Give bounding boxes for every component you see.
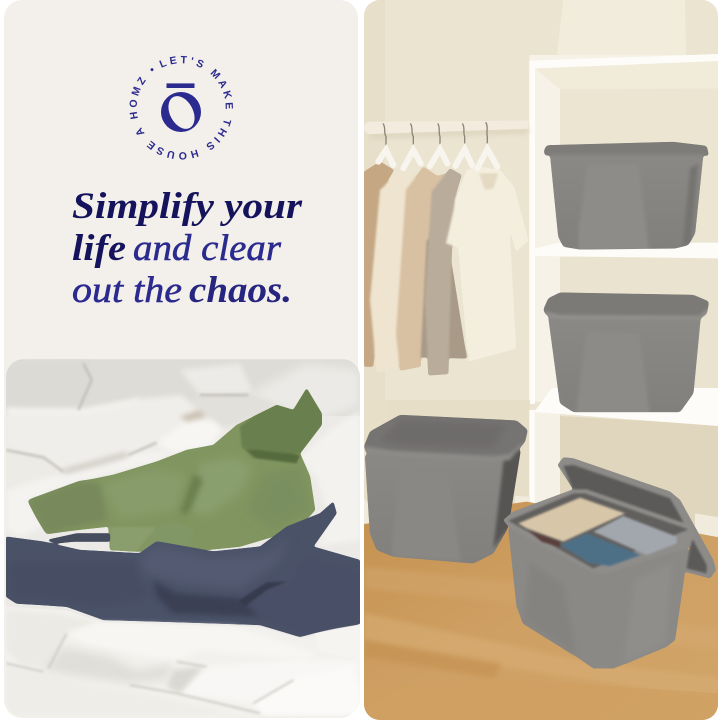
- garment: dark lining behind cardigan: [421, 240, 467, 358]
- hanging clothes: [364, 162, 528, 375]
- heading: Simplify your life and clear out the chaos: [72, 186, 303, 311]
- bedding: lower folds: [6, 619, 360, 716]
- garment: white t-shirt: [446, 167, 528, 362]
- towel: blue: [560, 533, 641, 566]
- photo: messy bed with clothes: [3, 359, 363, 717]
- storage bin: middle shelf: [543, 293, 709, 412]
- logo: circular slogan text: LET'S MAKE THIS HOUSE A HOMZ •: [130, 56, 233, 160]
- heading line 2 bold word: life: [72, 228, 126, 269]
- clothing: green shirt: [28, 388, 322, 552]
- shelving unit: [529, 54, 719, 404]
- folded box on top shelf: [557, 0, 686, 57]
- garment: grey cardigan: [425, 168, 462, 375]
- logo: macron bar: [166, 83, 194, 88]
- heading line 1: Simplify your: [72, 186, 303, 227]
- garment: cream sweater: [370, 168, 416, 373]
- bedding: right side pillow: [348, 412, 360, 424]
- storage bin: floor closed: [364, 415, 528, 563]
- garment: beige sweater: [396, 167, 447, 371]
- rod shadow on wall: [370, 129, 528, 138]
- bedding: upper folds: [6, 359, 360, 537]
- lower wall section: [364, 400, 719, 540]
- panel: left beige background: [4, 0, 358, 718]
- wall corner strip: [364, 0, 380, 16]
- wall: [364, 0, 718, 720]
- heading line 2 regular words: and clear: [133, 228, 282, 269]
- open lid: [558, 457, 716, 578]
- shelf below middle bin: [534, 388, 718, 426]
- towel: grey: [593, 516, 677, 555]
- garment: tan shirt: [364, 162, 394, 367]
- towel: beige: [518, 498, 625, 542]
- photo: organized closet with storage bins: [363, 0, 719, 720]
- heading line 3 regular words: out the: [72, 270, 182, 311]
- clothing: navy sweatpants: [6, 502, 360, 637]
- logo: letter O mark: [161, 92, 201, 133]
- clothing rod: [364, 121, 528, 134]
- bin rim: [503, 489, 695, 573]
- wood floor: [364, 502, 719, 720]
- bin body: [508, 528, 688, 668]
- hangers: [378, 123, 497, 168]
- storage bin: upper shelf: [544, 142, 709, 249]
- storage bin: open with folded towels: [503, 457, 716, 668]
- towel: maroon: [528, 531, 560, 547]
- bin interior: [508, 493, 688, 568]
- logo: circular badge: [130, 56, 233, 160]
- heading line 3 bold word: chaos.: [189, 270, 292, 311]
